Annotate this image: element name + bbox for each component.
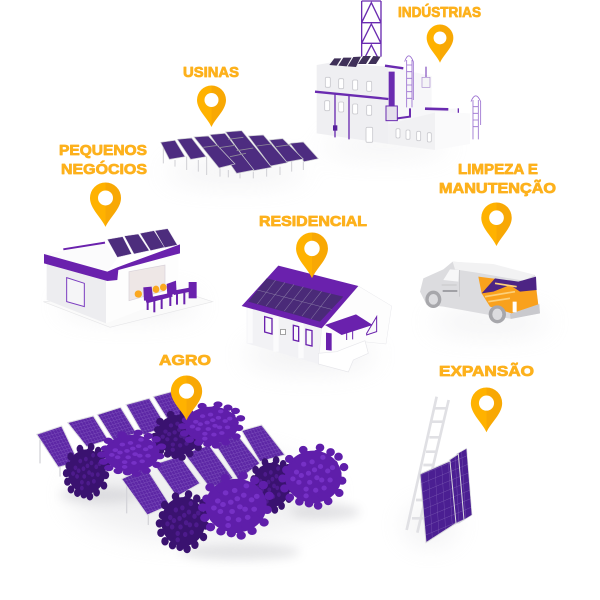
label: agro: AGRO <box>159 352 211 369</box>
van door line <box>442 270 459 297</box>
scene: small business <box>43 229 213 327</box>
label: indústrias: INDÚSTRIAS <box>398 3 481 21</box>
van rear wheel <box>489 305 506 323</box>
pin: indústrias <box>427 25 453 63</box>
tree: back dark foliage <box>155 413 202 457</box>
factory box <box>386 106 397 121</box>
scene: service van <box>420 262 540 323</box>
shop solar panels <box>107 229 177 257</box>
roof edge <box>63 243 105 249</box>
van livery text strip <box>443 290 457 292</box>
pin: residencial <box>296 232 328 278</box>
factory tower <box>362 1 381 57</box>
shop front wall <box>106 253 178 323</box>
agro panel supports <box>40 435 148 525</box>
agro panels <box>37 392 285 515</box>
pin: agro <box>171 375 202 420</box>
label: limpeza e manutenção <box>439 161 556 197</box>
van window <box>443 269 459 282</box>
house roof <box>242 266 358 328</box>
label: pequenos negócios <box>59 142 147 178</box>
shop window <box>129 265 165 301</box>
van front wheel <box>425 291 441 308</box>
van roof <box>453 262 535 281</box>
scene: residential house <box>242 266 392 372</box>
label: pequenos negócios: NEGÓCIOS <box>61 160 147 178</box>
factory low wing front <box>388 113 435 150</box>
pin: usinas <box>197 86 226 127</box>
house wall vent <box>281 329 285 335</box>
house front wall <box>247 306 325 364</box>
shop left wall <box>47 263 106 323</box>
pin: pequenos negócios <box>90 182 121 227</box>
factory main block <box>317 63 388 144</box>
van tail light <box>513 302 517 312</box>
label: limpeza e manutenção: MANUTENÇÃO <box>439 179 556 197</box>
front panel <box>420 461 456 543</box>
tree: right light foliage <box>283 448 344 506</box>
tree: right dark foliage <box>251 460 292 510</box>
factory ladders <box>405 56 481 139</box>
house solar array <box>248 278 343 322</box>
label: usinas: USINAS <box>183 64 239 81</box>
porch roof <box>325 314 373 335</box>
van purple livery <box>482 277 537 293</box>
tree: left light foliage <box>102 433 162 474</box>
scene: agriculture <box>37 392 344 549</box>
label: residencial: RESIDENCIAL <box>259 213 367 230</box>
house windows <box>265 317 377 346</box>
plant panel seams <box>203 137 291 157</box>
house door <box>326 333 332 351</box>
factory roof panels <box>329 56 381 67</box>
factory low wing side <box>435 112 470 150</box>
house corner columns <box>247 308 304 358</box>
back panel <box>457 448 472 523</box>
van orange streaks <box>485 283 517 302</box>
middle panel <box>449 454 464 524</box>
porch steps <box>318 341 368 372</box>
tree: front light foliage <box>203 476 269 536</box>
porch window <box>347 331 353 340</box>
label: pequenos negócios: PEQUENOS <box>59 142 147 159</box>
scene: solar plant <box>161 131 318 178</box>
soft ground shadows <box>60 138 550 543</box>
plant panels <box>161 131 318 173</box>
array grid <box>257 280 332 319</box>
tree: back light foliage <box>183 405 241 445</box>
van orange livery <box>478 277 538 313</box>
scene: industries factory <box>315 1 481 150</box>
factory upper back wall <box>388 67 457 133</box>
shop floor <box>43 290 213 327</box>
plant supports <box>163 147 303 178</box>
ladder <box>407 397 449 533</box>
label: limpeza e manutenção: LIMPEZA E <box>458 161 538 178</box>
pin: limpeza e manutenção <box>481 202 512 246</box>
pin: expansão <box>471 387 502 432</box>
tree: front dark foliage <box>159 494 207 549</box>
tree contact shadows <box>60 487 360 560</box>
factory windows <box>325 77 431 142</box>
factory purple valve <box>333 125 337 131</box>
shop door <box>67 278 84 307</box>
van body <box>420 262 540 319</box>
house gable side <box>318 286 392 364</box>
patio furniture <box>143 281 197 312</box>
factory pipes and band <box>315 66 458 145</box>
factory box small <box>422 77 430 87</box>
orange cushions <box>135 284 167 298</box>
label: expansão: EXPANSÃO <box>439 362 534 380</box>
van bumper <box>510 304 540 319</box>
tree: left dark foliage <box>66 447 107 496</box>
scene: expansion panels and ladder <box>407 397 472 543</box>
shop roof fascia <box>44 244 180 281</box>
shop roof top <box>44 243 117 272</box>
